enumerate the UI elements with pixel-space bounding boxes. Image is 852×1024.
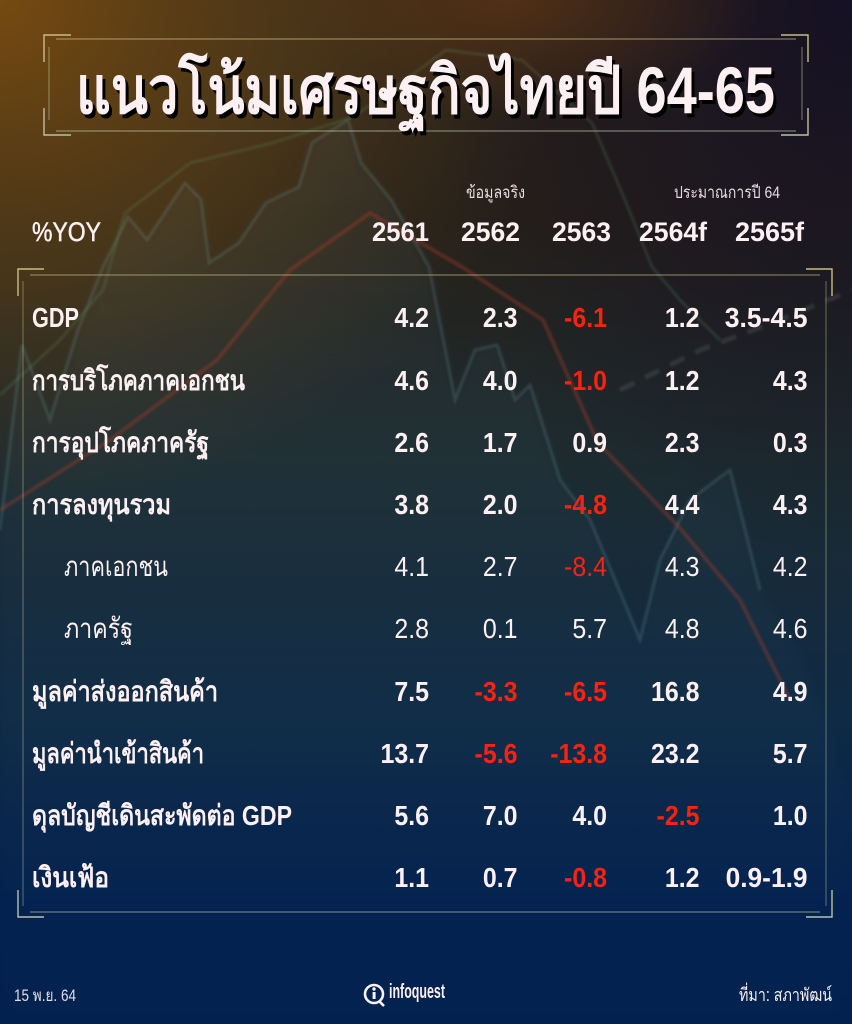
- column 2562 values: -3.3: [475, 676, 518, 707]
- column 2562 values: 1.7: [483, 427, 518, 458]
- column 2562 values: 7.0: [483, 800, 518, 831]
- column 2563 values: -1.0: [564, 365, 607, 396]
- column 2561 values: 3.8: [394, 489, 429, 520]
- column 2564f values: -2.5: [657, 800, 700, 831]
- column 2565f values: 0.9-1.9: [726, 862, 808, 893]
- row labels: ดุลบัญชีเดินสะพัดต่อ GDP: [32, 800, 292, 833]
- table header row: %YOY: [32, 217, 101, 247]
- column 2565f values: 4.2: [773, 551, 808, 582]
- column 2564f values: 1.2: [665, 365, 700, 396]
- column 2563 values: 4.0: [572, 800, 607, 831]
- column 2563 values: -8.4: [564, 551, 607, 582]
- table header row: [32, 217, 805, 247]
- row labels: การอุปโภคภาครัฐ: [32, 425, 209, 461]
- column 2562 values: [475, 302, 518, 893]
- table header row: 2563: [552, 217, 611, 247]
- column 2561 values: 4.1: [394, 551, 429, 582]
- title frame: [44, 35, 808, 135]
- column 2565f values: 1.0: [773, 800, 808, 831]
- column 2561 values: 2.8: [394, 613, 429, 644]
- column 2561 values: 2.6: [394, 427, 429, 458]
- column 2561 values: 5.6: [394, 800, 429, 831]
- column 2562 values: 0.1: [483, 613, 518, 644]
- column 2562 values: 0.7: [483, 862, 518, 893]
- column 2564f values: 1.2: [665, 862, 700, 893]
- column 2564f values: [651, 302, 700, 893]
- table frame: [18, 269, 832, 917]
- column 2564f values: 2.3: [665, 427, 700, 458]
- column 2565f values: 5.7: [773, 738, 808, 769]
- column 2564f values: 1.2: [665, 302, 700, 333]
- column 2563 values: -13.8: [550, 738, 607, 769]
- column 2564f values: 23.2: [651, 738, 700, 769]
- header: actual data label: ข้อมูลจริง: [466, 183, 525, 203]
- logo: infoquest: infoquest: [389, 981, 445, 1003]
- table header row: 2561: [372, 217, 429, 247]
- column 2561 values: 1.1: [394, 862, 429, 893]
- row labels: [32, 302, 292, 893]
- column 2565f values: [725, 302, 808, 893]
- column 2561 values: [381, 302, 429, 893]
- column 2561 values: 4.2: [394, 302, 429, 333]
- row labels: ภาครัฐ: [64, 613, 133, 645]
- logo: infoquest: [365, 981, 445, 1006]
- row labels: เงินเฟ้อ: [32, 862, 109, 893]
- column 2564f values: 16.8: [651, 676, 700, 707]
- column 2563 values: [550, 302, 607, 893]
- column 2563 values: 5.7: [572, 613, 607, 644]
- column 2565f values: 4.6: [773, 613, 808, 644]
- footer date: 15 พ.ย. 64: [14, 986, 76, 1005]
- row labels: มูลค่านำเข้าสินค้า: [32, 738, 204, 771]
- column 2563 values: -6.5: [564, 676, 607, 707]
- row labels: ภาคเอกชน: [64, 551, 168, 582]
- column 2563 values: -4.8: [564, 489, 607, 520]
- column 2562 values: 2.3: [483, 302, 518, 333]
- column 2565f values: 4.3: [773, 489, 808, 520]
- column 2562 values: 2.7: [483, 551, 518, 582]
- row labels: มูลค่าส่งออกสินค้า: [32, 676, 218, 709]
- column 2561 values: 7.5: [394, 676, 429, 707]
- table header row: 2562: [461, 217, 520, 247]
- column 2561 values: 13.7: [381, 738, 429, 769]
- column 2565f values: 4.3: [773, 365, 808, 396]
- column 2562 values: 4.0: [483, 365, 518, 396]
- column 2562 values: -5.6: [475, 738, 518, 769]
- column 2565f values: 0.3: [773, 427, 808, 458]
- table header row: 2564f: [639, 217, 708, 247]
- row labels: การลงทุนรวม: [32, 489, 171, 522]
- column 2563 values: -0.8: [564, 862, 607, 893]
- column 2564f values: 4.3: [665, 551, 700, 582]
- row labels: การบริโภคภาคเอกชน: [32, 363, 245, 396]
- header: forecast label: ประมาณการปี 64: [674, 183, 780, 202]
- column 2563 values: 0.9: [572, 427, 607, 458]
- row labels: GDP: [32, 302, 79, 333]
- column 2563 values: -6.1: [564, 302, 607, 333]
- column 2562 values: 2.0: [483, 489, 518, 520]
- column 2565f values: 3.5-4.5: [725, 302, 808, 333]
- column 2565f values: 4.9: [773, 676, 808, 707]
- table header row: 2565f: [735, 217, 805, 247]
- column 2561 values: 4.6: [394, 365, 429, 396]
- column 2564f values: 4.4: [665, 489, 700, 520]
- column 2564f values: 4.8: [665, 613, 700, 644]
